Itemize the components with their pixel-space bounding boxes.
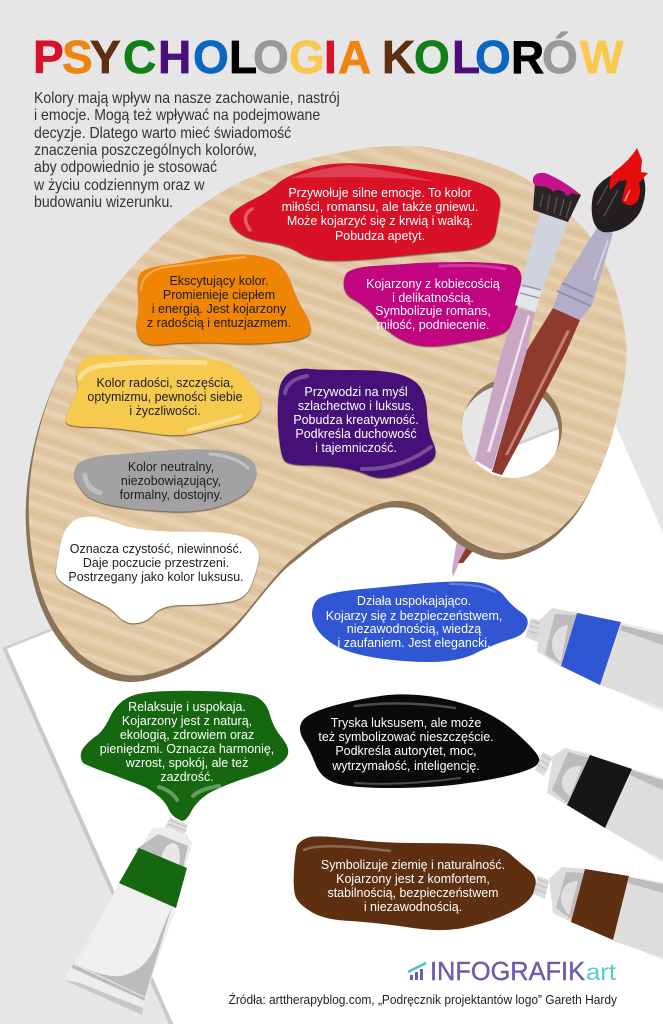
intro text: decyzje. Dlatego warto mieć świadomość <box>34 125 292 142</box>
icon: flat brush <box>475 173 581 470</box>
panel: gray paint <box>74 449 256 512</box>
title: K <box>382 31 415 83</box>
orange text: Promienieje ciepłem <box>163 287 275 302</box>
intro text: znaczenia poszczególnych kolorów, <box>34 142 257 159</box>
panel: blue paint tube <box>312 582 663 712</box>
white text: Daje poczucie przestrzeni. <box>83 555 229 570</box>
brown text: i niezawodnością. <box>364 899 462 914</box>
blue text: Kojarzy się z bezpieczeństwem, <box>326 608 502 623</box>
blue tube <box>525 608 663 712</box>
title: Y <box>90 31 121 83</box>
brown text: Symbolizuje ziemię i naturalność. <box>321 857 505 872</box>
intro text: budowaniu wizerunku. <box>34 194 173 211</box>
panel: orange paint <box>136 254 311 345</box>
panel: magenta paint <box>344 262 521 346</box>
green text: ekologią, zdrowiem oraz <box>120 727 254 742</box>
blue text: i zaufaniem. Jest elegancki. <box>337 635 491 650</box>
title: S <box>62 31 93 83</box>
intro text: Kolory mają wpływ na nasze zachowanie, nastrój <box>34 90 340 107</box>
intro text: aby odpowiednio je stosować <box>34 159 218 176</box>
intro text: i emocje. Mogą też wpływać na podejmowane <box>34 107 320 124</box>
magenta text: i delikatnością. <box>392 290 474 305</box>
title: G <box>289 31 325 83</box>
white text: Postrzegany jako kolor luksusu. <box>68 569 244 584</box>
white text: Oznacza czystość, niewinność. <box>70 541 242 556</box>
logo <box>408 958 585 986</box>
brown text: stabilnością, bezpieczeństwem <box>327 885 499 900</box>
gray text: Kolor neutralny, <box>128 459 214 474</box>
purple text: Podkreśla duchowość <box>295 426 417 441</box>
source line: Źródła: arttherapyblog.com, „Podręcznik projektantów logo” Gareth Hardy <box>229 992 618 1007</box>
magenta text: Kojarzony z kobiecością <box>366 276 501 291</box>
panel: purple paint <box>278 369 436 478</box>
green tube <box>63 817 192 1015</box>
purple text: Pobudza kreatywność. <box>293 412 419 427</box>
title: Ó <box>542 31 578 83</box>
green text: zazdrość. <box>160 769 214 784</box>
palette <box>26 146 627 682</box>
black text: też symbolizować nieszczęście. <box>318 729 494 744</box>
orange text: i energią. Jest kojarzony <box>152 301 287 316</box>
title: R <box>511 31 544 83</box>
panel: green paint tube <box>63 691 288 1015</box>
panel: yellow paint <box>66 355 261 435</box>
title: H <box>158 31 191 83</box>
green text: Kojarzony jest z naturą, <box>122 713 252 728</box>
purple text: i tajemniczość. <box>315 440 397 455</box>
yellow text: i życzliwości. <box>129 403 201 418</box>
panel: red paint <box>230 163 500 261</box>
black text: wytrzymałość, inteligencję. <box>331 758 480 773</box>
purple text: Przywodzi na myśl <box>304 384 408 399</box>
panel: brown paint tube <box>294 836 663 960</box>
title: W <box>580 31 624 83</box>
icon: chart logo <box>408 963 426 980</box>
purple text: szlachectwo i luksus. <box>298 398 414 413</box>
orange text: z radością i entuzjazmem. <box>147 315 291 330</box>
black tube <box>535 748 663 863</box>
panel: black paint tube <box>300 694 663 863</box>
magenta text: Symbolizuje romans, <box>375 303 491 318</box>
title: O <box>193 31 229 83</box>
red text: Pobudza apetyt. <box>335 228 425 243</box>
brush tips below palette <box>452 540 482 577</box>
title: L <box>229 31 257 83</box>
green text: wzrost, spokój, ale też <box>125 755 248 770</box>
title: C <box>123 31 156 83</box>
yellow text: optymizmu, pewności siebie <box>87 389 243 404</box>
icon: round brush <box>492 148 648 475</box>
gray text: formalny, dostojny. <box>120 487 222 502</box>
title: L <box>452 31 480 83</box>
logo text: INFOGRAFIK <box>430 958 585 986</box>
brown text: Kojarzony jest z komfortem, <box>336 871 490 886</box>
title: I <box>324 31 337 83</box>
panel: white paint <box>56 517 259 623</box>
orange text: Ekscytujący kolor. <box>169 273 269 288</box>
title: O <box>253 31 289 83</box>
black text: Podkreśla autorytet, moc, <box>335 743 477 758</box>
red text: Może kojarzyć się z krwią i walką. <box>287 213 473 228</box>
green text: Relaksuje i uspokaja. <box>128 699 246 714</box>
yellow text: Kolor radości, szczęścia, <box>96 375 234 390</box>
black text: Tryska luksusem, ale może <box>331 715 481 730</box>
brown tube <box>533 867 663 960</box>
green text: pieniędzmi. Oznacza harmonię, <box>100 741 274 756</box>
title: A <box>338 31 371 83</box>
logo suffix: art <box>586 959 617 985</box>
title: O <box>414 31 450 83</box>
blue text: Działa uspokajająco. <box>357 593 471 608</box>
title: O <box>475 31 511 83</box>
title: P <box>33 31 64 83</box>
magenta text: miłość, podniecenie. <box>377 317 489 332</box>
intro text: w życiu codziennym oraz w <box>33 177 205 194</box>
red text: miłości, romansu, ale także gniewu. <box>282 199 478 214</box>
gray text: niezobowiązujący, <box>121 473 221 488</box>
white paper sheet <box>3 408 663 1024</box>
blue text: niezawodnością, wiedzą <box>347 621 482 636</box>
red text: Przywołuje silne emocje. To kolor <box>288 185 472 200</box>
